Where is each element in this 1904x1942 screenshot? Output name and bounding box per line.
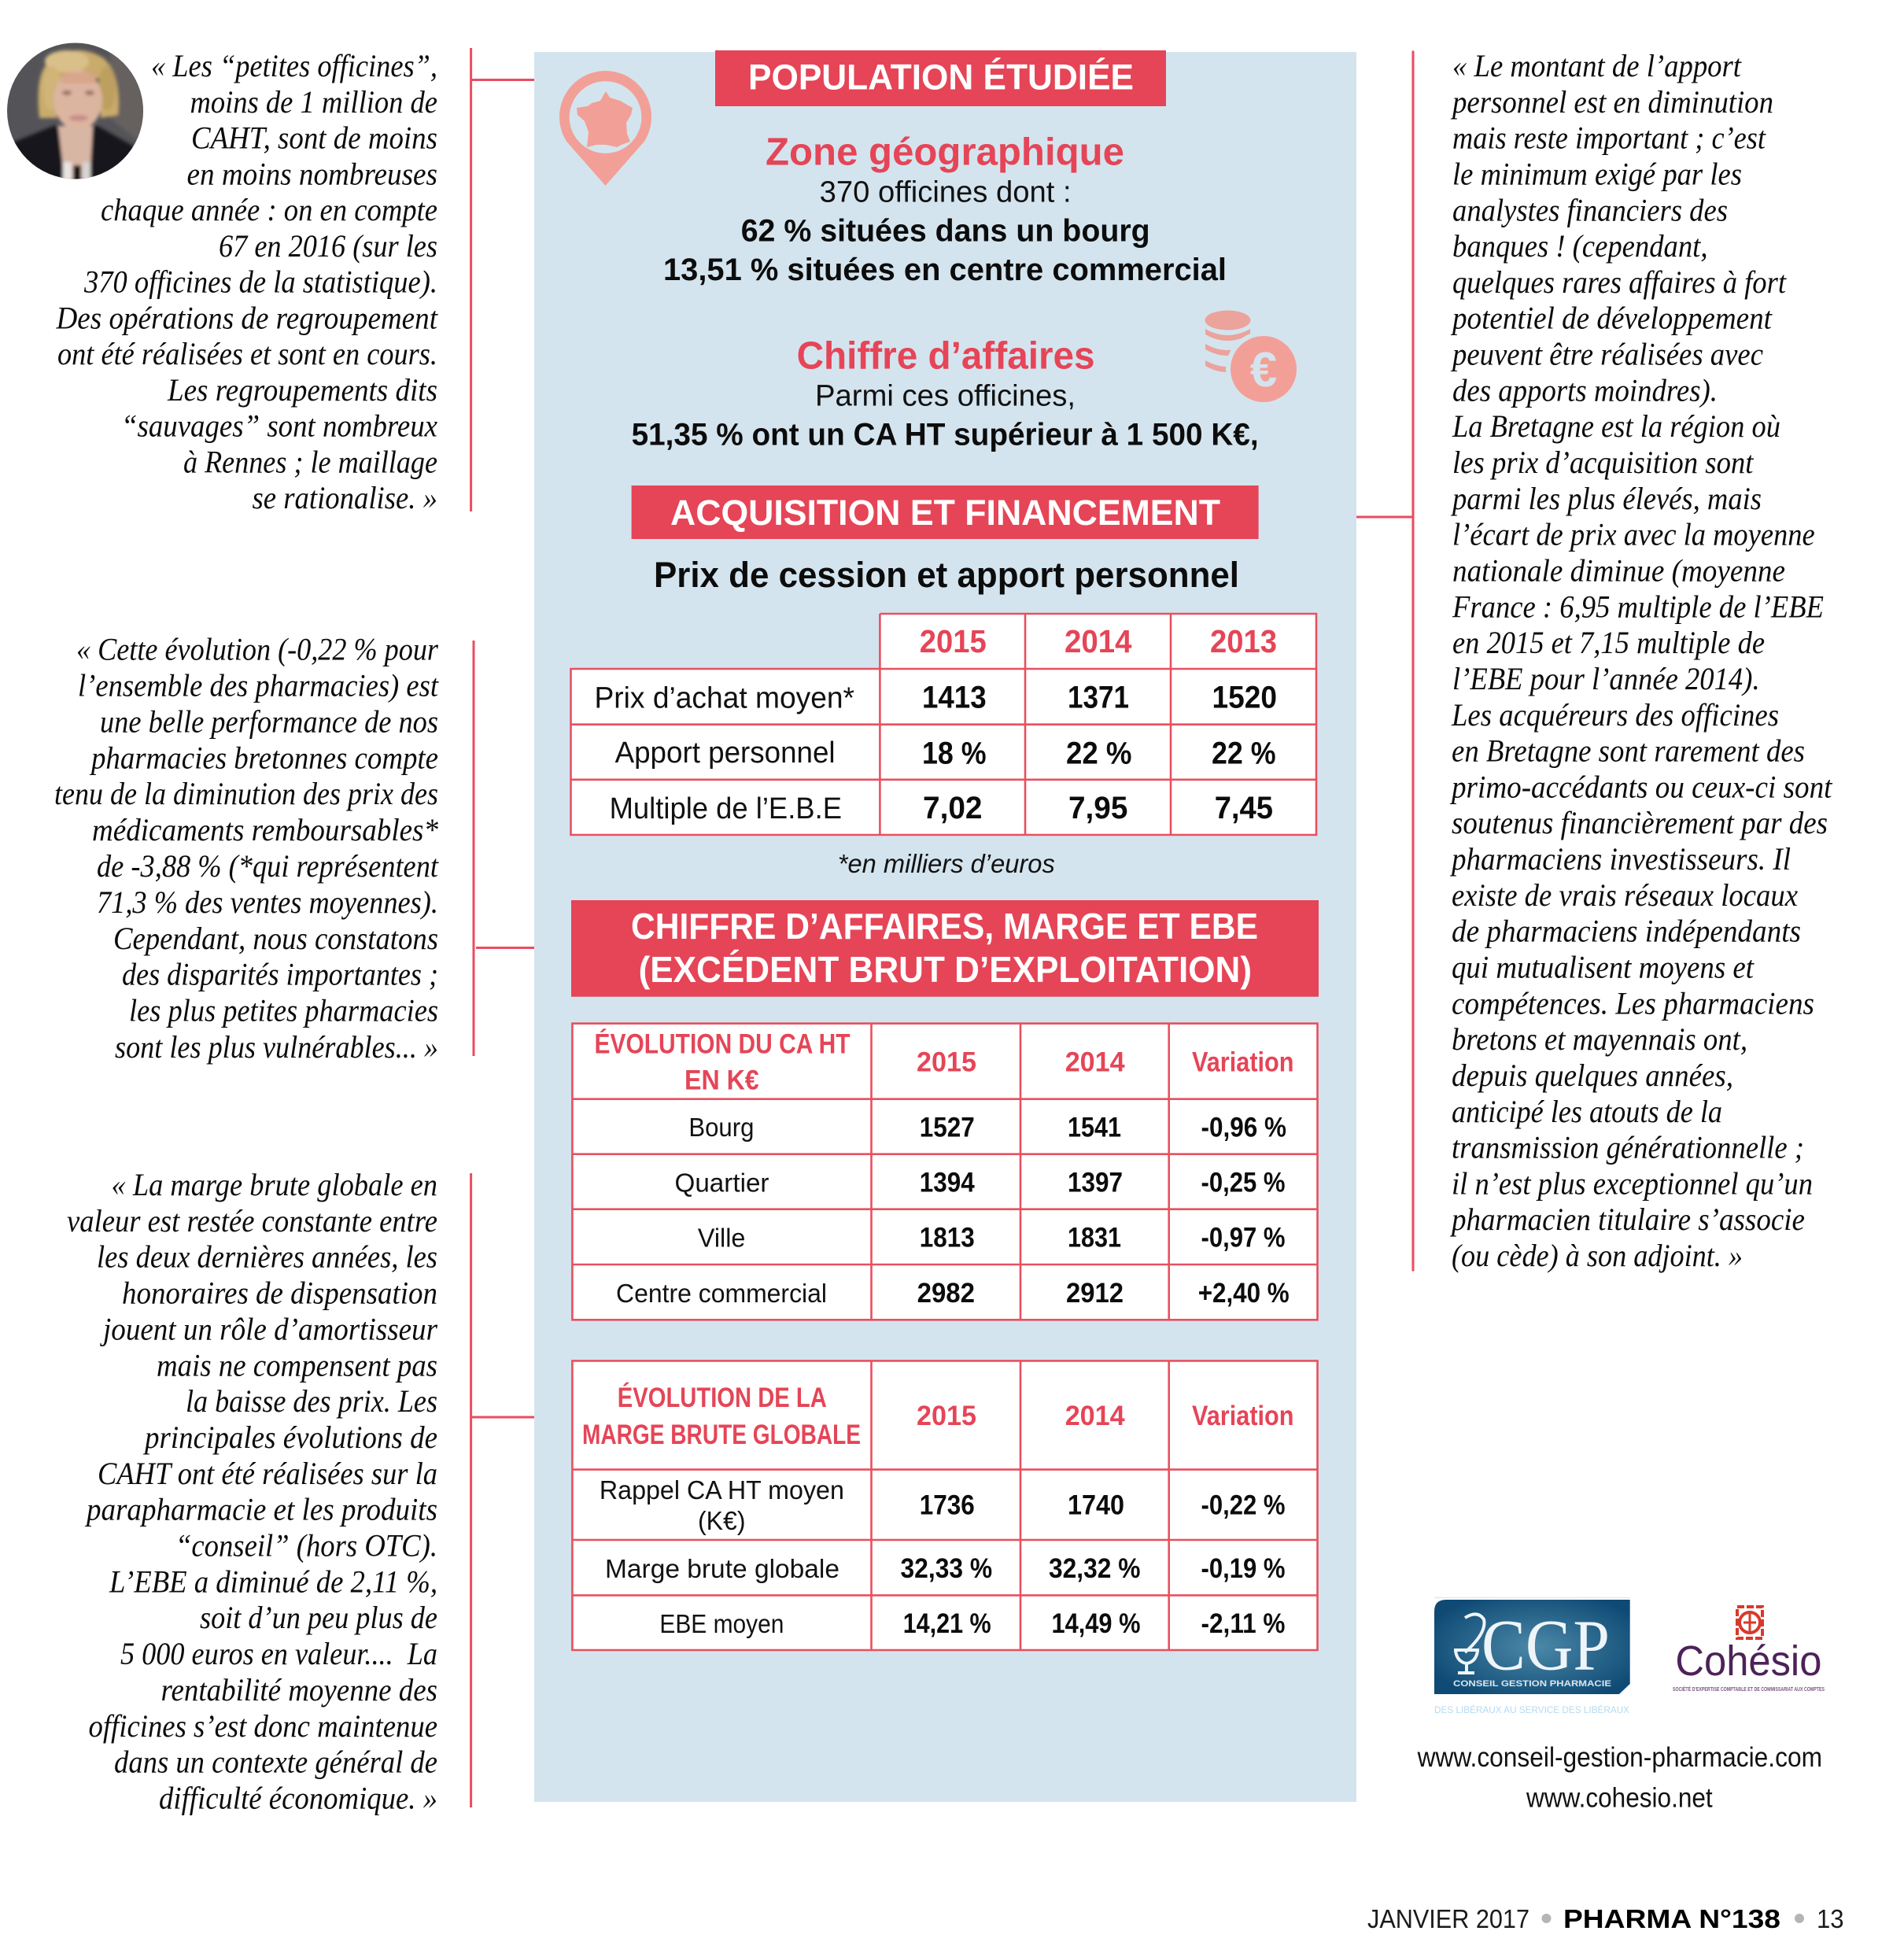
footnote: *en milliers d’euros [838,849,1055,878]
table: évolution du CA HT: 1541 [1068,1112,1121,1143]
logo: CGP: CGP [1482,1605,1610,1685]
footer: issue and page number: PHARMA N°138 [1563,1904,1780,1933]
table: évolution du CA HT: -0,96 % [1201,1112,1286,1143]
quote: apport personnel: pharmacien titulaire s’associe [1449,1202,1805,1237]
table: évolution de la marge brute globale [572,1361,1317,1650]
quote: petites officines [56,48,438,515]
table: prix de cession: 22 % [1212,737,1276,771]
quote: marge brute: CAHT ont été réalisées sur la [98,1456,437,1491]
quote: marge brute: rentabilité moyenne des [161,1672,437,1708]
quote: évolution: des disparités importantes ; [122,957,438,992]
table: évolution du CA HT [572,1024,1317,1320]
quote: apport personnel: quelques rares affaires à fort [1452,264,1787,300]
table: prix de cession [571,614,1316,835]
quote: petites officines: “sauvages” sont nombreux [121,408,437,444]
quote: petites officines: se rationalise. » [252,480,437,515]
logo: Cohésio [1673,1607,1825,1693]
quote: évolution: les plus petites pharmacies [129,993,438,1028]
quote: apport personnel: parmi les plus élevés, mais [1450,481,1762,516]
quote: évolution: l’ensemble des pharmacies) est [78,667,439,703]
quote: marge brute: principales évolutions de [142,1420,437,1455]
quote: marge brute: les deux dernières années, les [97,1239,437,1275]
logo: CGP: DES LIBÉRAUX AU SERVICE DES LIBÉRAUX [1434,1704,1629,1715]
table: évolution de la marge brute globale: 1736 [920,1490,975,1520]
table: évolution du CA HT: 1394 [920,1167,975,1198]
table: évolution de la marge brute globale: 14,21 % [903,1608,991,1639]
quote: apport personnel: de pharmaciens indépendants [1452,914,1801,949]
quote: marge brute: mais ne compensent pas [157,1347,437,1383]
section: zone géographique: 370 officines dont : [820,176,1072,209]
section: chiffre d'affaires [632,335,1259,452]
quote: marge brute: difficulté économique. » [159,1780,437,1816]
panel: centre [534,52,1356,1802]
table: évolution de la marge brute globale: 2015 [917,1401,976,1431]
quote: évolution: Cependant, nous constatons [113,921,438,956]
section: chiffre d'affaires: Parmi ces officines, [815,379,1076,412]
quote: apport personnel: peuvent être réalisées avec [1450,337,1763,372]
quote: évolution: sont les plus vulnérables... » [115,1029,438,1065]
quote: petites officines: 67 en 2016 (sur les [219,228,437,264]
table: évolution du CA HT: Ville [698,1224,745,1253]
table: évolution du CA HT: 2982 [917,1278,975,1309]
footer: issue and page number: JANVIER 2017 [1367,1904,1529,1933]
table: évolution de la marge brute globale: 32,32 % [1049,1553,1140,1584]
quote: apport personnel: primo-accédants ou ceux-ci sont [1449,769,1832,804]
table: évolution de la marge brute globale: -0,19 % [1201,1553,1286,1584]
quote: apport personnel: l’EBE pour l’année 2014). [1452,661,1760,696]
quote: évolution: médicaments remboursables* [92,812,438,847]
quote: petites officines: 370 officines de la statistique). [83,264,437,299]
quote: évolution: une belle performance de nos [100,703,438,739]
heading: acquisition et financement [632,486,1259,539]
quote: petites officines: moins de 1 million de [190,84,437,120]
table: évolution de la marge brute globale: MARGE BRUTE GLOBALE [582,1420,861,1450]
quote: apport personnel: l’écart de prix avec la moyenne [1452,517,1815,552]
portrait photo [7,42,144,189]
table: évolution du CA HT: -0,97 % [1201,1223,1286,1253]
section: chiffre d'affaires: Chiffre d’affaires [797,335,1095,378]
icon: coins with euro [1205,310,1301,407]
quote: évolution: de -3,88 % (*qui représentent [97,848,439,884]
table: évolution de la marge brute globale: ÉVOLUTION DE LA [618,1382,827,1413]
quote: évolution [54,632,439,1065]
quote: apport personnel: analystes financiers des [1452,192,1728,227]
quote: apport personnel: des apports moindres). [1452,372,1718,408]
connector: right quote [1356,50,1413,1272]
table: prix de cession: Prix d’achat moyen* [595,682,854,715]
quote: marge brute: soit d’un peu plus de [200,1600,437,1635]
quote: petites officines: à Rennes ; le maillage [183,444,437,479]
table: évolution de la marge brute globale: Variation [1192,1401,1293,1431]
quote: apport personnel: en 2015 et 7,15 multiple de [1452,625,1765,660]
table: évolution du CA HT: 1527 [920,1112,975,1143]
table: prix de cession: 1371 [1068,681,1129,715]
quote: évolution: pharmacies bretonnes compte [89,740,438,775]
section: zone géographique [663,131,1227,287]
logo: CGP: CONSEIL GESTION PHARMACIE [1453,1679,1611,1689]
icon: map pin with France [559,71,651,186]
quote: évolution: tenu de la diminution des prix des [54,776,438,811]
table: évolution du CA HT: EN K€ [684,1065,759,1095]
quote: marge brute: 5 000 euros en valeur.... La [120,1636,437,1671]
table: évolution du CA HT: +2,40 % [1198,1278,1290,1309]
table: évolution du CA HT: 2912 [1066,1278,1124,1309]
table: prix de cession: 7,45 [1215,791,1273,825]
quote: petites officines: ont été réalisées et sont en cours. [57,336,437,371]
heading: chiffre d'affaires, marge et EBE: CHIFFRE D’AFFAIRES, MARGE ET EBE [631,906,1258,947]
heading: population étudiée [715,50,1166,106]
quote: apport personnel: les prix d’acquisition sont [1452,445,1754,480]
quote: apport personnel: transmission générationnelle ; [1452,1130,1804,1165]
quote: apport personnel: soutenus financièrement par des [1452,805,1828,840]
quote: apport personnel: La Bretagne est la région où [1452,408,1780,444]
quote: apport personnel: banques ! (cependant, [1452,228,1707,264]
table: évolution de la marge brute globale: (K€) [698,1506,746,1535]
icon: coins with euro: € [1250,343,1277,397]
table: prix de cession: 2015 [920,623,987,659]
table: prix de cession: 18 % [922,737,987,771]
table: évolution du CA HT: 2015 [917,1047,976,1078]
quote: apport personnel: personnel est en diminution [1450,84,1773,120]
section: zone géographique: Zone géographique [766,131,1124,174]
quote: apport personnel: France : 6,95 multiple de l’EBE [1452,589,1824,624]
heading: chiffre d'affaires, marge et EBE: (EXCÉDENT BRUT D’EXPLOITATION) [639,949,1252,990]
heading: population étudiée: POPULATION ÉTUDIÉE [748,57,1134,98]
quote: apport personnel [1449,48,1832,1273]
quote: apport personnel: (ou cède) à son adjoint. » [1452,1238,1743,1273]
quote: apport personnel: en Bretagne sont rarement des [1452,733,1805,769]
table: évolution de la marge brute globale: 32,33 % [900,1553,992,1584]
quote: apport personnel: existe de vrais réseaux locaux [1452,877,1798,913]
quote: marge brute: L’EBE a diminué de 2,11 %, [109,1564,437,1599]
quote: marge brute: honoraires de dispensation [122,1276,437,1311]
subheading: prix de cession: Prix de cession et apport personnel [654,555,1239,595]
table: évolution de la marge brute globale: -2,11 % [1201,1608,1286,1639]
table: prix de cession: 1520 [1212,681,1277,715]
table: évolution du CA HT: Bourg [688,1113,754,1142]
quote: marge brute [67,1167,437,1816]
quote: petites officines: Des opérations de regroupement [56,300,438,335]
quote: petites officines: CAHT, sont de moins [191,120,437,156]
table: évolution du CA HT: Variation [1192,1047,1293,1078]
table: évolution du CA HT: 2014 [1065,1047,1125,1078]
quote: marge brute: officines s’est donc maintenue [88,1708,437,1744]
table: prix de cession: Apport personnel [615,737,836,770]
table: prix de cession: 1413 [922,681,987,715]
quote: marge brute: valeur est restée constante entre [67,1203,437,1239]
connector: quote 1 [471,48,534,511]
quote: marge brute: « La marge brute globale en [112,1167,437,1202]
table: évolution de la marge brute globale: Marge brute globale [605,1554,839,1583]
table: évolution du CA HT: 1831 [1068,1223,1121,1253]
quote: évolution: 71,3 % des ventes moyennes). [97,884,438,920]
heading: chiffre d'affaires, marge et EBE [571,900,1319,997]
table: prix de cession: 2013 [1210,623,1277,659]
websites: www.cohesio.net [1526,1783,1713,1814]
quote: apport personnel: le minimum exigé par les [1452,156,1742,192]
quote: marge brute: jouent un rôle d’amortisseur [99,1311,437,1346]
quote: apport personnel: « Le montant de l’apport [1452,48,1742,83]
section: zone géographique: 62 % situées dans un bourg [741,214,1150,249]
heading: acquisition et financement: ACQUISITION ET FINANCEMENT [670,493,1220,533]
table: évolution du CA HT: Quartier [675,1168,769,1197]
quote: apport personnel: il n’est plus exceptionnel qu’un [1452,1165,1813,1201]
logo: Cohésio: Cohésio [1675,1637,1821,1685]
quote: apport personnel: pharmaciens investisseurs. Il [1449,841,1791,877]
table: évolution de la marge brute globale: -0,22 % [1201,1490,1286,1520]
quote: apport personnel: potentiel de développement [1450,301,1773,336]
quote: apport personnel: compétences. Les pharmaciens [1452,985,1814,1021]
table: évolution du CA HT: 1397 [1068,1167,1123,1198]
table: évolution de la marge brute globale: EBE moyen [659,1609,784,1638]
table: prix de cession: 2014 [1065,623,1132,659]
logo: CGP [1434,1597,1630,1715]
quote: apport personnel: Les acquéreurs des officines [1451,697,1779,733]
section: zone géographique: 13,51 % situées en centre commercial [663,253,1227,287]
table: évolution de la marge brute globale: Rappel CA HT moyen [600,1475,844,1504]
table: prix de cession: 7,95 [1068,791,1127,825]
quote: marge brute: parapharmacie et les produits [84,1492,437,1527]
quote: évolution: « Cette évolution (-0,22 % pour [76,632,438,667]
table: évolution de la marge brute globale: 14,49 % [1051,1608,1141,1639]
table: évolution du CA HT: ÉVOLUTION DU CA HT [595,1028,850,1059]
table: prix de cession: 22 % [1066,737,1131,771]
quote: marge brute: dans un contexte général de [114,1744,437,1780]
websites: www.conseil-gestion-pharmacie.com [1417,1742,1822,1773]
table: évolution de la marge brute globale: 2014 [1065,1401,1125,1431]
footer: issue and page number: 13 [1817,1904,1844,1933]
footer: issue and page number [1367,1904,1844,1933]
table: prix de cession: Multiple de l’E.B.E [610,792,842,825]
quote: apport personnel: qui mutualisent moyens et [1452,949,1755,985]
quote: apport personnel: depuis quelques années, [1452,1058,1733,1093]
quote: marge brute: “conseil” (hors OTC). [175,1528,437,1563]
table: évolution du CA HT: -0,25 % [1201,1167,1286,1198]
quote: apport personnel: anticipé les atouts de la [1452,1094,1722,1129]
quote: petites officines: Les regroupements dits [167,372,437,408]
connector: quote 3 [471,1173,534,1807]
quote: marge brute: la baisse des prix. Les [186,1383,437,1419]
table: évolution du CA HT: Centre commercial [616,1279,827,1308]
quote: petites officines: en moins nombreuses [187,156,437,191]
table: évolution du CA HT: 1813 [920,1223,975,1253]
websites [1417,1742,1822,1814]
quote: apport personnel: bretons et mayennais ont, [1452,1021,1747,1057]
connector: quote 2 [474,641,534,1056]
table: évolution de la marge brute globale: 1740 [1068,1490,1124,1520]
quote: apport personnel: nationale diminue (moyenne [1452,552,1785,589]
quote: petites officines: chaque année : on en compte [101,192,437,227]
logo: Cohésio: SOCIÉTÉ D’EXPERTISE COMPTABLE ET DE COMMISSARIAT AUX COMPTES [1673,1685,1825,1693]
quote: apport personnel: mais reste important ; c’est [1452,120,1766,156]
section: chiffre d'affaires: 51,35 % ont un CA HT supérieur à 1 500 K€, [632,417,1259,452]
table: prix de cession: 7,02 [923,791,982,825]
quote: petites officines: « Les “petites officines”, [151,48,437,83]
